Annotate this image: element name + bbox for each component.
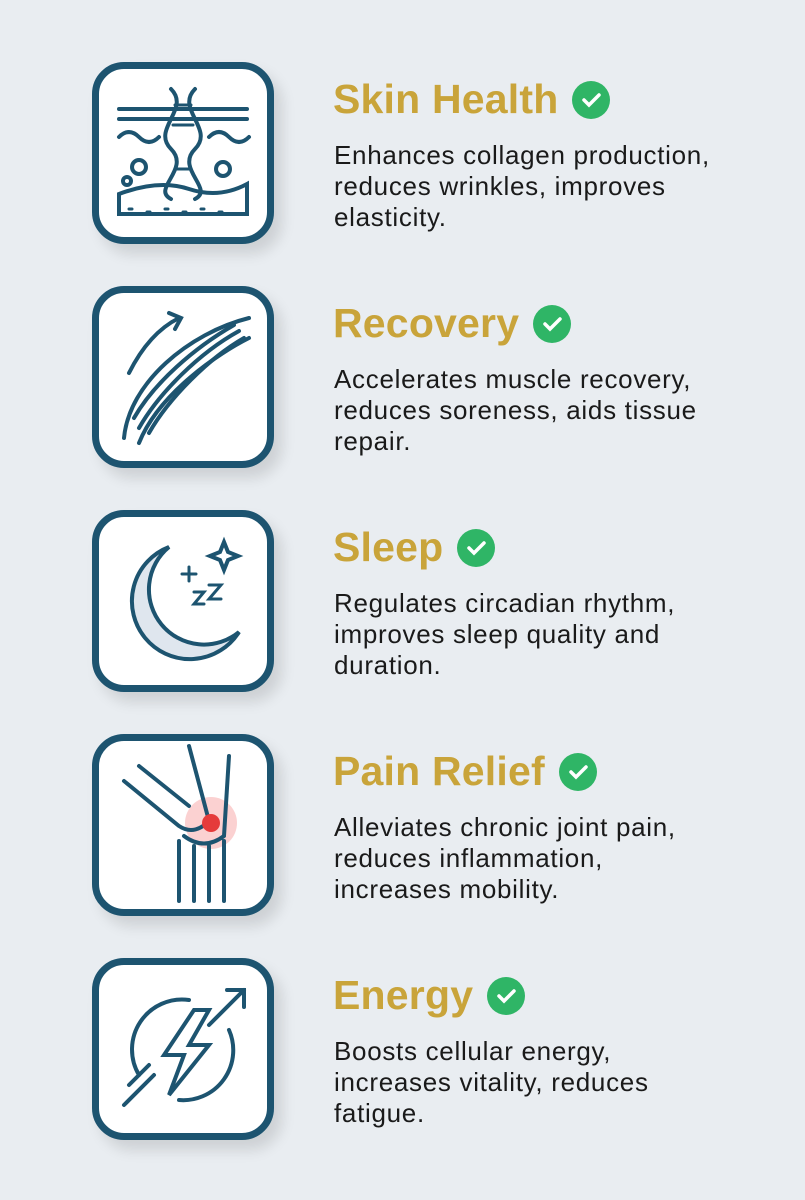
text: repair. xyxy=(334,426,411,456)
text: increases vitality, reduces xyxy=(334,1067,649,1097)
text: fatigue. xyxy=(334,1098,425,1128)
heading xyxy=(333,524,495,570)
text xyxy=(334,364,697,456)
text: elasticity. xyxy=(334,202,447,232)
text xyxy=(334,140,710,232)
icon: moon xyxy=(92,510,274,692)
text: reduces wrinkles, improves xyxy=(334,171,666,201)
heading: Skin Health xyxy=(333,76,558,122)
text xyxy=(334,1036,649,1128)
text: Alleviates chronic joint pain, xyxy=(334,812,676,842)
text: Regulates circadian rhythm, xyxy=(334,588,675,618)
row: energy xyxy=(92,958,649,1154)
icon: knee joint xyxy=(92,734,274,916)
text: reduces soreness, aids tissue xyxy=(334,395,697,425)
text: reduces inflammation, xyxy=(334,843,603,873)
icon: skin layers with DNA xyxy=(92,62,274,244)
text: Enhances collagen production, xyxy=(334,140,710,170)
row: pain relief xyxy=(92,734,676,930)
row: skin health xyxy=(92,62,710,258)
heading: Energy xyxy=(333,972,473,1018)
row: sleep xyxy=(92,510,675,706)
text: improves sleep quality and xyxy=(334,619,660,649)
heading: Pain Relief xyxy=(333,748,545,794)
text: Boosts cellular energy, xyxy=(334,1036,611,1066)
text xyxy=(334,812,676,904)
heading: Recovery xyxy=(333,300,519,346)
icon: muscle xyxy=(92,286,274,468)
icon: lightning with arrows xyxy=(92,958,274,1140)
text: increases mobility. xyxy=(334,874,559,904)
text: Accelerates muscle recovery, xyxy=(334,364,691,394)
row: recovery xyxy=(92,286,697,482)
text: duration. xyxy=(334,650,441,680)
text xyxy=(334,588,675,680)
heading: Sleep xyxy=(333,524,443,570)
